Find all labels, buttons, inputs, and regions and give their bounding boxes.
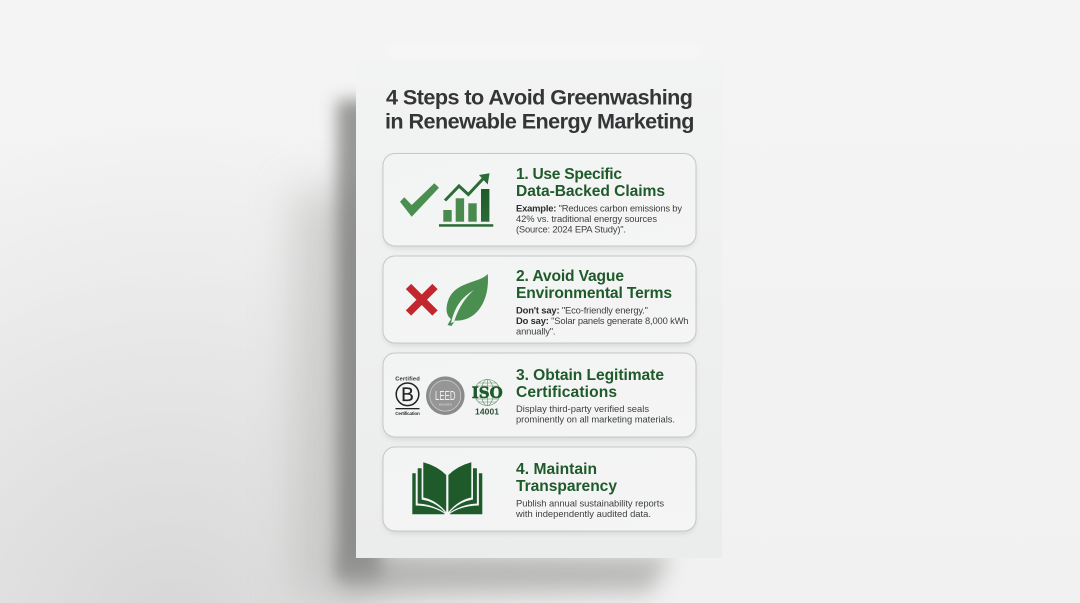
icon: B Corp seal: Certification — [395, 411, 420, 416]
step 4 body — [515, 498, 664, 519]
step 2 heading: 2. Avoid Vague — [516, 268, 624, 285]
icon: check mark — [400, 183, 439, 217]
step 1 body: (Source: 2024 EPA Study)". — [516, 224, 626, 234]
panel: poster — [356, 60, 722, 558]
step 1 heading — [516, 166, 665, 200]
step 4 heading: Transparency — [516, 478, 617, 495]
title: 4 Steps to Avoid Greenwashing — [386, 84, 693, 110]
panel: step 4 — [383, 447, 696, 534]
step 3 body: Display third-party verified seals — [516, 403, 649, 414]
step 2 heading — [516, 268, 672, 302]
step 3 heading: 3. Obtain Legitimate — [516, 367, 664, 384]
step 2 body — [516, 304, 688, 336]
step 4 body: with independently audited data. — [515, 508, 651, 519]
panel: step 2 — [383, 256, 696, 346]
step 2 heading: Environmental Terms — [516, 285, 672, 302]
icon: ISO 14001 seal: ISO — [472, 383, 503, 402]
title — [385, 84, 694, 134]
panel: step 1 — [383, 154, 696, 249]
step 1 body — [516, 202, 682, 234]
icon: red cross — [408, 286, 435, 313]
step 1 body: 42% vs. traditional energy sources — [516, 213, 657, 224]
step 3 body — [516, 403, 675, 424]
title: in Renewable Energy Marketing — [385, 108, 694, 134]
step 4 body: Publish annual sustainability reports — [516, 498, 664, 508]
step 4 heading: 4. Maintain — [516, 461, 597, 478]
step 2 body: Don't say: "Eco-friendly energy." — [516, 304, 648, 316]
panel: step 3 — [383, 353, 696, 440]
step 3 heading: Certifications — [516, 384, 617, 401]
step 2 body: annually". — [516, 326, 556, 336]
step 1 heading: 1. Use Specific — [516, 166, 622, 183]
step 2 body: Do say: "Solar panels generate 8,000 kWh — [516, 315, 688, 326]
icon: ISO 14001 seal — [472, 380, 503, 416]
step 1 body: Example: "Reduces carbon emissions by — [516, 202, 682, 214]
icon: LEED seal: MEMBER — [439, 402, 453, 406]
icon: B Corp seal: Certified — [395, 376, 420, 382]
step 4 heading — [516, 461, 617, 495]
icon: ISO 14001 seal: 14001 — [475, 406, 499, 416]
icon: B Corp seal — [395, 376, 420, 416]
icon: B Corp seal: B — [401, 385, 414, 406]
icon: leaf — [447, 274, 488, 326]
step 1 heading: Data-Backed Claims — [516, 183, 665, 200]
page shadow — [295, 45, 705, 600]
icon: open book — [412, 462, 482, 514]
icon: LEED seal: LEED — [435, 389, 456, 403]
icon: growth bar chart — [439, 173, 493, 227]
step 3 body: prominently on all marketing materials. — [516, 414, 675, 424]
step 3 heading — [516, 367, 664, 401]
icon: LEED seal — [426, 376, 465, 415]
